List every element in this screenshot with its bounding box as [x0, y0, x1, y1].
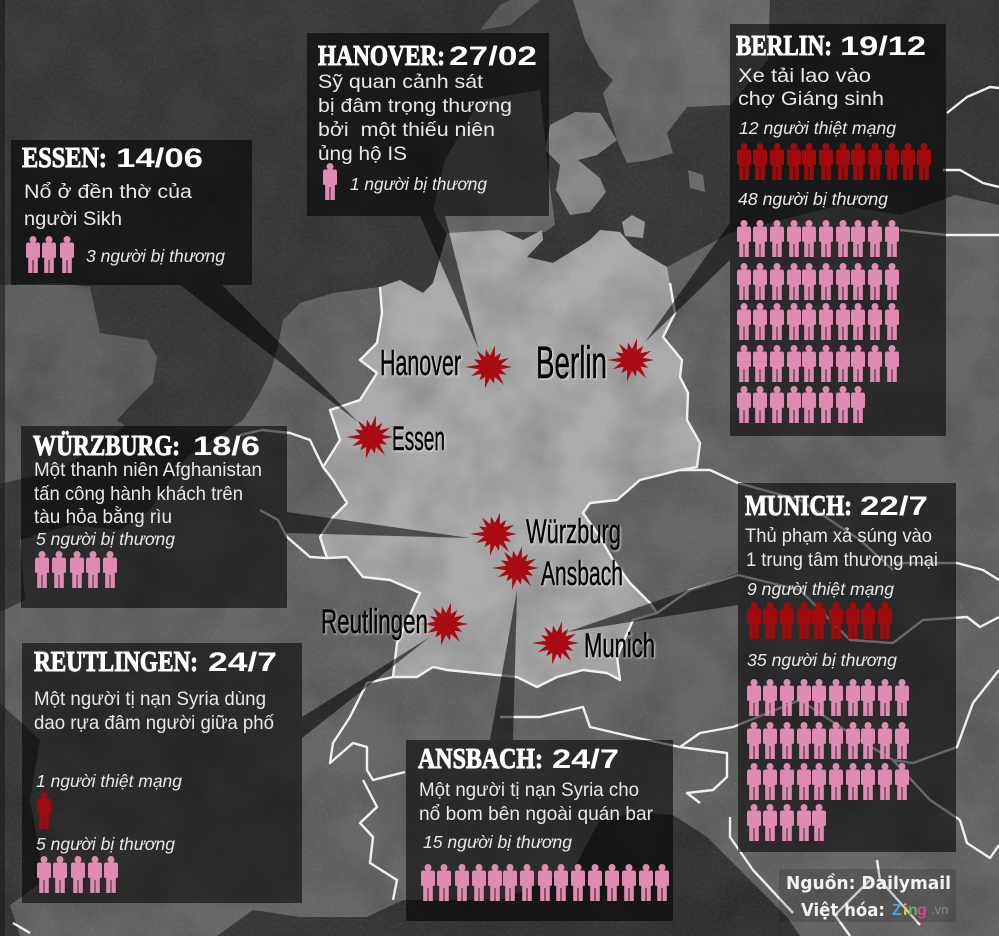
land: Gotland: [688, 170, 705, 192]
land: Rügen: [622, 215, 645, 238]
description: [318, 71, 512, 165]
killed icons: [737, 143, 931, 180]
description: Một người tị nạn Syria cho: [419, 779, 639, 801]
land: Great Britain: [0, 283, 157, 484]
injured icons: [737, 220, 899, 423]
injured icons: [37, 856, 118, 893]
source box: [779, 869, 956, 922]
heading: HANOVER:: [318, 40, 445, 72]
description: nổ bom bên ngoài quán bar: [419, 803, 653, 825]
description: bởi một thiếu niên: [318, 119, 495, 141]
description: [24, 181, 192, 230]
caption: 1 người bị thương: [350, 174, 487, 194]
panel: Reutlingen: [22, 643, 302, 903]
date: 27/02: [449, 41, 537, 71]
caption: 3 người bị thương: [86, 246, 225, 266]
date: 22/7: [860, 491, 928, 521]
land: Danish islands: [545, 112, 617, 215]
date: 24/7: [208, 647, 277, 677]
panel: Würzburg: [21, 426, 287, 608]
injured icons: [35, 551, 117, 588]
description: Sỹ quan cảnh sát: [318, 71, 484, 93]
city label: Reutlingen: Reutlingen: [321, 603, 428, 641]
injured icons: [747, 679, 909, 841]
pointer: Ansbach: [490, 590, 517, 740]
caption: injured: 5 người bị thương: [36, 834, 175, 854]
heading: WÜRZBURG:: [33, 430, 180, 462]
panel: Berlin: [730, 24, 946, 436]
logo: Zing.vn: [892, 902, 948, 919]
icon: blast Hanover: [465, 346, 512, 388]
date: 18/6: [193, 431, 260, 461]
logo: Zing.vn: n: [908, 902, 918, 919]
panel: Munich: [738, 483, 956, 852]
city label: Munich: Munich: [584, 627, 655, 665]
caption: killed: 9 người thiệt mạng: [747, 579, 894, 599]
land: Sweden: [573, 0, 770, 163]
land: Norway corner: [480, 0, 540, 30]
description: [745, 525, 938, 571]
caption: killed: 1 người thiệt mạng: [36, 771, 182, 791]
land: Jutland: [433, 90, 555, 235]
description: bị đâm trọng thương: [318, 95, 512, 117]
caption: killed: 12 người thiệt mạng: [739, 118, 896, 138]
description: Nổ ở đền thờ của: [24, 181, 192, 203]
injured icon: [323, 163, 337, 200]
panel: Ansbach: [406, 740, 673, 921]
description: [738, 65, 884, 110]
caption: injured: 48 người bị thương: [738, 189, 888, 209]
icon: blast Ansbach: [492, 546, 539, 590]
description: dao rựa đâm người giữa phố: [34, 712, 274, 734]
pointer: Reutlingen: [302, 637, 430, 738]
city label: Ansbach: Ansbach: [541, 555, 623, 593]
date: 14/06: [116, 143, 203, 173]
injured icons: [26, 236, 74, 273]
logo: Zing.vn: i: [903, 902, 907, 919]
description: [34, 688, 274, 734]
icon: blast Würzburg: [470, 512, 517, 556]
description: chợ Giáng sinh: [738, 88, 884, 110]
description: [419, 779, 653, 825]
description: Thủ phạm xả súng vào: [745, 525, 932, 547]
city label: Berlin: Berlin: [536, 337, 607, 388]
icon: blast Munich: [532, 622, 579, 664]
city label: Essen: Essen: [392, 420, 445, 458]
pointer: Hanover: [420, 216, 478, 348]
killed icon: [37, 792, 51, 829]
pointer: Munich: [567, 573, 738, 632]
icon: blast Essen: [346, 416, 393, 458]
logo: Zing.vn: .vn: [931, 902, 948, 917]
heading: MUNICH:: [745, 490, 852, 522]
heading: ESSEN:: [22, 142, 107, 174]
city label: Hanover: Hanover: [380, 342, 461, 383]
description: tàu hỏa bằng rìu: [34, 505, 172, 528]
date: 24/7: [552, 744, 619, 774]
panel: Essen: [11, 140, 252, 285]
logo: Zing.vn: Z: [892, 902, 902, 919]
caption: injured: 35 người bị thương: [747, 650, 897, 670]
description: ủng hộ IS: [318, 143, 407, 165]
description: Một thanh niên Afghanistan: [34, 459, 262, 481]
heading: ANSBACH:: [418, 743, 543, 775]
pointer: Essen: [180, 285, 358, 422]
caption: 5 người bị thương: [36, 529, 175, 549]
pointer: Berlin: [645, 223, 730, 342]
description: Xe tải lao vào: [738, 65, 871, 87]
panel: Hanover: [307, 33, 549, 216]
description: tấn công hành khách trên: [34, 483, 243, 505]
description: 1 trung tâm thương mại: [746, 549, 938, 571]
icon: blast Reutlingen: [421, 602, 468, 646]
heading: BERLIN:: [736, 30, 832, 62]
land: continental Europe: [0, 195, 999, 936]
logo: Zing.vn: g: [917, 902, 927, 919]
heading: REUTLINGEN:: [34, 646, 198, 678]
pointer: Würzburg: [287, 512, 470, 538]
land: Germany: [320, 230, 700, 687]
city label: Würzburg: Würzburg: [526, 513, 621, 551]
description: Một người tị nạn Syria dùng: [34, 688, 266, 710]
icon: blast Berlin: [607, 338, 654, 382]
description: [34, 459, 262, 528]
injured icons: [421, 864, 669, 901]
killed icons: [747, 602, 892, 639]
caption: 15 người bị thương: [423, 832, 572, 852]
translation credit: Việt hóa:: [801, 901, 885, 921]
date: 19/12: [840, 31, 926, 61]
source credit: Nguồn: Dailymail: [786, 873, 951, 894]
description: người Sikh: [24, 208, 122, 230]
